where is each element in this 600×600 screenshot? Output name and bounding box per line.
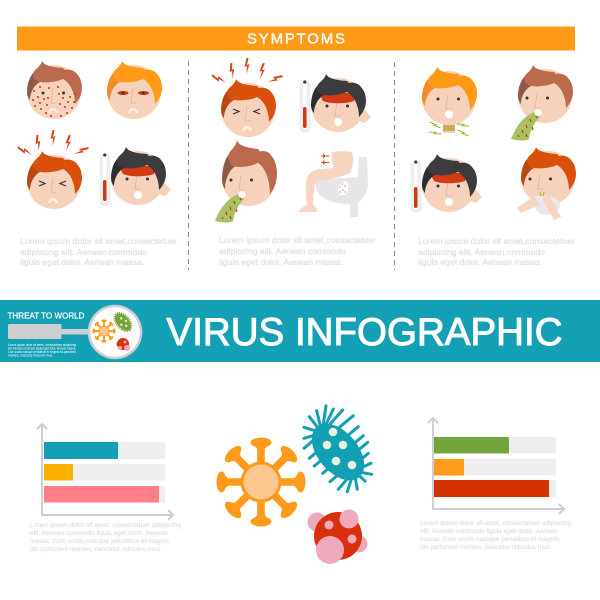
face: headache	[17, 130, 89, 209]
face: fever with thermometer	[100, 147, 171, 206]
banner small text: montes, nascetur ridiculus mus.	[8, 352, 53, 358]
icon: diarrhea on toilet	[299, 151, 368, 217]
face: vomiting	[215, 140, 277, 222]
text: left chart caption: Lorem ipsum dolor sit amet, consectetuer adipiscing	[30, 522, 181, 529]
text: right chart caption: dis parturient montes, nascetur ridiculus mus.	[420, 544, 552, 551]
face: skin rash	[27, 61, 82, 119]
text: left chart caption	[30, 522, 181, 553]
text: column two: adipiscing elit. Aenean commodo	[219, 246, 346, 256]
bacterium spots	[323, 428, 356, 469]
face: fever with thermometer	[300, 74, 371, 133]
face: sore throat	[422, 67, 477, 136]
text: column one: adipiscing elit. Aenean commodo	[20, 247, 147, 257]
text: left chart caption: elit. Aenean commodo ligula eget dolor. Aenean	[30, 530, 168, 537]
text: left chart caption: massa. Cum sociis natoque penatibus et magnis	[30, 538, 170, 545]
text: right chart caption: Lorem ipsum dolor sit amet, consectetuer adipiscing	[420, 520, 571, 527]
text: column two: ligula eget dolor. Aenean massa.	[219, 257, 343, 267]
banner label: threat to world: THREAT TO WORLD	[8, 310, 84, 320]
text: column three: adipiscing elit. Aenean commodo	[418, 247, 545, 257]
bar chart: right	[428, 418, 564, 514]
text: column three: ligula eget dolor. Aenean massa.	[418, 257, 542, 267]
face: fever with thermometer	[410, 154, 482, 213]
banner small text: Cum sociis natoque penatibus et magnis dis parturient	[8, 349, 77, 354]
banner small text: elit. Aenean commodo ligula eget dolor. Aenean massa.	[8, 346, 76, 350]
icon: teal bacterium	[301, 406, 375, 492]
banner small text: Lorem ipsum dolor sit amet, consectetuer adipiscing	[8, 342, 76, 347]
panel: symptoms column three	[410, 65, 576, 267]
heading: symptoms: SYMPTOMS	[247, 30, 345, 48]
title: VIRUS INFOGRAPHIC	[166, 311, 562, 354]
banner: virus infographic	[0, 300, 600, 362]
face: sneezing into tissue	[517, 147, 576, 220]
face: red eyes	[107, 61, 162, 119]
divider right	[394, 62, 396, 270]
text: column three	[418, 236, 575, 267]
text: column three: Lorem ipsum dolor sit amet,consectetuer	[418, 236, 575, 246]
text: column one	[20, 236, 177, 267]
icon: orange virus	[216, 438, 306, 526]
text: right chart caption: massa. Cum sociis natoque penatibus et magnis	[420, 536, 560, 543]
panel: symptoms column two	[211, 58, 376, 267]
text: right chart caption	[420, 520, 571, 551]
banner small text	[8, 342, 77, 358]
face: vomiting	[511, 65, 573, 140]
text: column one: Lorem ipsum dolor sit amet,consectetuer	[20, 236, 177, 246]
icon: magnifying glass with germs	[8, 306, 141, 358]
text: column one: ligula eget dolor. Aenean massa.	[20, 257, 144, 267]
text: left chart caption: dis parturient montes, nascetur ridiculus mus.	[30, 546, 162, 553]
face: headache	[211, 58, 283, 137]
text: column two	[219, 235, 376, 267]
bar chart: left	[37, 424, 173, 520]
panel: symptoms column one	[17, 61, 177, 267]
text: column two: Lorem ipsum dolor sit amet,consectetuer	[219, 235, 376, 245]
icon: red germ	[308, 510, 368, 564]
divider left	[188, 61, 190, 270]
header bar: symptoms	[17, 26, 575, 50]
text: right chart caption: elit. Aenean commodo ligula eget dolor. Aenean	[420, 528, 558, 535]
